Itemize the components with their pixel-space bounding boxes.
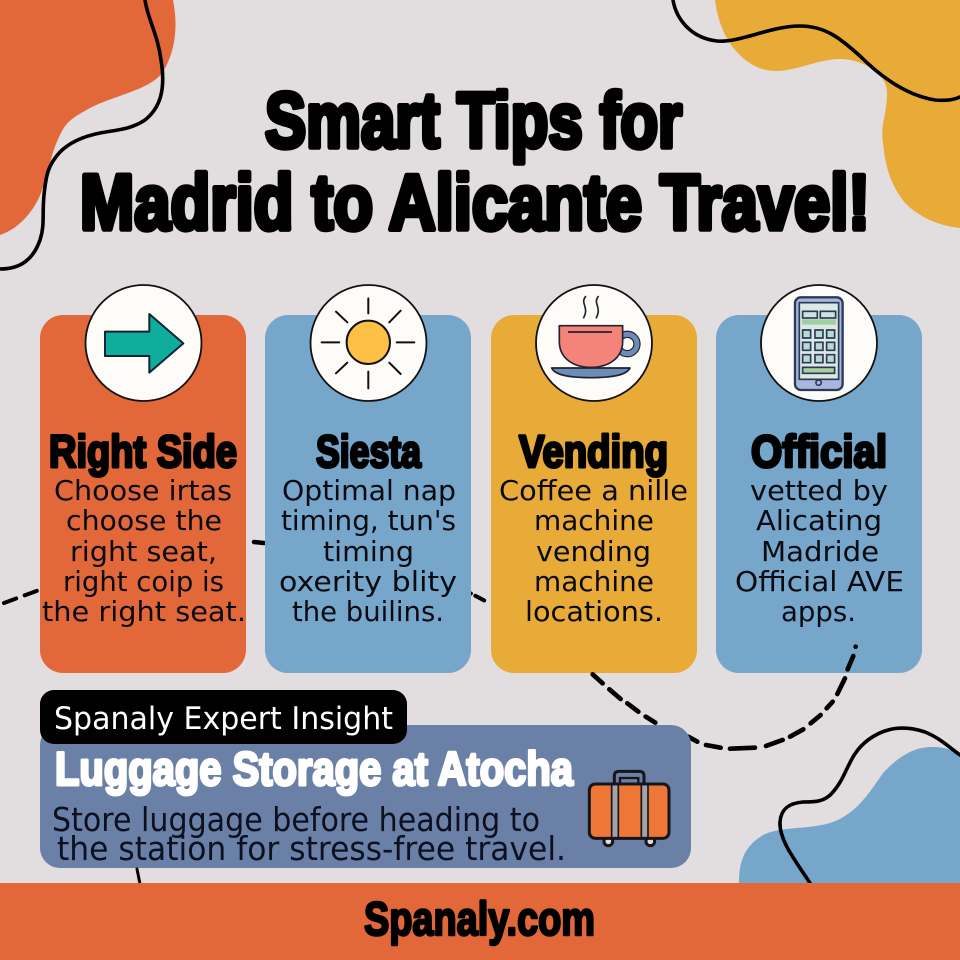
dash: between cards one and two [254,542,264,543]
tag: Spanaly Expert Insight: Spanaly Expert Insight [54,701,393,737]
card text: siesta: timing, tun's [281,505,456,537]
card text: siesta: the builins. [292,596,444,628]
icon: phone app [761,285,877,401]
card text: vending: vending [536,536,651,568]
card text: right side: right seat, [70,536,217,568]
card text: siesta: oxerity blity [279,566,457,598]
curve: bottom right line [780,728,960,883]
card text: official: apps. [781,596,856,628]
curve: top left line [0,0,163,269]
blob: bottom right blue [739,747,960,883]
icon: sun [310,285,426,401]
card text: right side: Choose irtas [54,475,232,507]
card: blue official [716,315,922,673]
card text: right side: choose the [66,505,222,537]
card text: vending: machine [534,566,654,598]
footer band [0,883,960,960]
line: stub under insight panel [137,869,140,884]
card text: official: Alicating [756,505,882,537]
card: blue [265,315,471,673]
card text: vending [499,475,688,628]
card text: vending: locations. [525,596,663,628]
tag: Spanaly Expert Insight [40,690,407,744]
icon: suitcase [589,771,669,846]
main title: Smart Tips for [265,76,682,164]
card text: siesta [279,475,457,628]
dash: between cards two and three [470,593,491,604]
card heading: Right Side: Right Side [49,426,237,477]
card text: right side: the right seat. [42,596,246,628]
card text: right side [42,475,246,628]
dashes: left connector [4,590,39,603]
card heading: Vending: Vending [519,426,668,477]
card text: vending: machine [534,505,654,537]
card text: official [735,475,904,628]
card text: siesta: timing [323,536,414,568]
card text: vending: Coffee a nille [499,475,688,507]
card: yellow [491,315,697,673]
blob: top left orange [0,0,176,235]
curve: top right line [673,0,960,100]
insight heading: Luggage Storage at Atocha [55,742,574,795]
icon: right arrow [86,285,202,401]
dashes: curved connector [593,644,858,749]
card text: official: Official AVE [735,566,904,598]
card: orange [40,315,246,673]
icon: coffee cup [536,285,652,401]
panel: expert insight [40,725,691,868]
insight text: Store luggage before heading to [52,800,540,839]
card text: siesta: Optimal nap [282,475,456,507]
footer brand: Spanaly.com [364,892,595,945]
main title [80,76,870,246]
insight text [52,800,566,868]
insight text: the station for stress-free travel. [57,829,566,868]
card text: official: vetted by [750,475,888,507]
card text: right side: right coip is [63,566,224,598]
card heading: Siesta: Siesta [316,426,422,477]
blob: top right yellow [715,0,960,228]
card text: official: Madride [761,536,879,568]
card heading: Official: Official [751,426,887,477]
